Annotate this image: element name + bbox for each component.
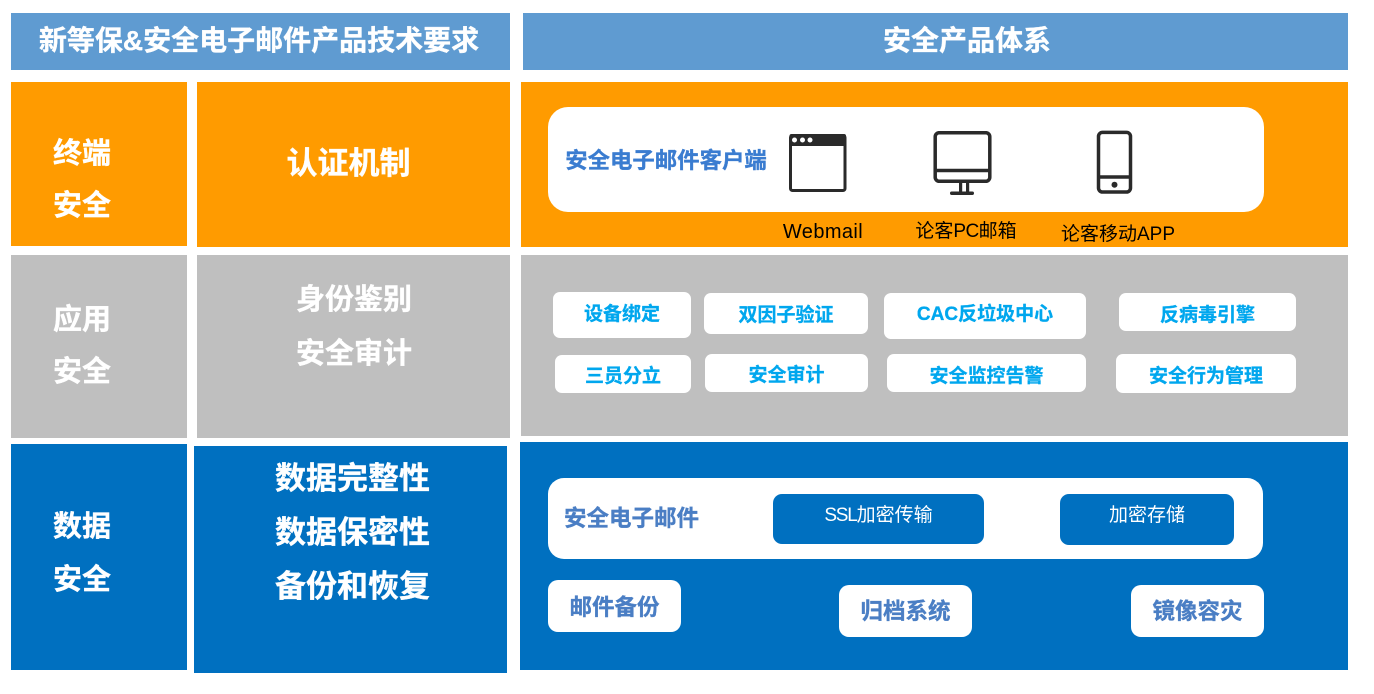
SSL encrypted transfer: SSL加密传输 (824, 505, 933, 526)
panel: data security label: 数据 (53, 511, 111, 543)
icon: desktop monitor (933, 131, 992, 195)
panel: application security label (11, 255, 187, 438)
label: mobile app: 论客移动APP (1061, 224, 1175, 245)
chip: device binding (553, 292, 691, 338)
panel: application security label: 应用 (53, 304, 111, 336)
chip: antivirus (1119, 293, 1296, 331)
email backup: 邮件备份 (569, 595, 660, 620)
panel: client products (521, 82, 1348, 247)
card title: 安全电子邮件 (564, 506, 699, 531)
panel: application products (521, 255, 1348, 436)
client card (548, 107, 1264, 212)
panel: data integrity list: 数据完整性 (275, 461, 430, 496)
header: requirements: 新等保&安全电子邮件产品技术要求 (39, 25, 479, 56)
panel: data security label (11, 444, 187, 670)
chip: behavior management (1116, 354, 1296, 393)
mirror disaster recovery (1131, 585, 1264, 637)
header: requirements (11, 13, 510, 70)
label: PC mailbox: 论客PC邮箱 (915, 221, 1017, 242)
chip: monitoring and alerts (887, 354, 1086, 392)
icon: mobile phone (1096, 130, 1132, 194)
chip: two factor (704, 293, 868, 334)
chip: security audit: 安全审计 (748, 365, 824, 386)
icon: webmail window (789, 134, 846, 192)
email backup (548, 580, 681, 632)
chip: anti spam (884, 293, 1086, 339)
archive system: 归档系统 (860, 599, 950, 624)
panel: terminal security label: 终端 (53, 138, 111, 170)
panel: identity and audit: 身份鉴别 (296, 284, 412, 316)
chip: behavior management: 安全行为管理 (1149, 366, 1263, 387)
chip: anti spam: CAC反垃圾中心 (917, 304, 1053, 325)
panel: data security label: 安全 (53, 564, 111, 596)
panel: data integrity list: 备份和恢复 (275, 569, 430, 604)
panel: application security label: 安全 (53, 356, 111, 388)
mirror disaster recovery: 镜像容灾 (1152, 599, 1242, 624)
panel: data integrity list: 数据保密性 (275, 515, 430, 550)
panel: data integrity list (194, 446, 507, 673)
panel: data products (520, 442, 1348, 670)
panel: terminal security label (11, 82, 187, 246)
header: security product system (523, 13, 1348, 70)
chip: antivirus: 反病毒引擎 (1160, 305, 1255, 326)
header: security product system: 安全产品体系 (883, 25, 1051, 56)
chip: device binding: 设备绑定 (584, 304, 660, 325)
chip: monitoring and alerts: 安全监控告警 (929, 366, 1044, 387)
panel: identity and audit: 安全审计 (296, 338, 412, 370)
panel: authentication: 认证机制 (286, 146, 410, 181)
encrypted storage: 加密存储 (1109, 505, 1185, 526)
chip: separation of three roles: 三员分立 (585, 366, 661, 387)
panel: identity and audit (197, 255, 510, 438)
encrypted storage (1060, 494, 1234, 545)
panel: authentication (197, 82, 510, 247)
secure email card (548, 478, 1263, 559)
archive system (839, 585, 972, 637)
chip: two factor: 双因子验证 (738, 305, 834, 326)
SSL encrypted transfer (773, 494, 984, 544)
client card title: 安全电子邮件客户端 (565, 148, 767, 173)
panel: terminal security label: 安全 (53, 190, 111, 222)
chip: separation of three roles (555, 355, 691, 393)
label: Webmail: Webmail (783, 221, 863, 243)
chip: security audit (705, 354, 868, 392)
